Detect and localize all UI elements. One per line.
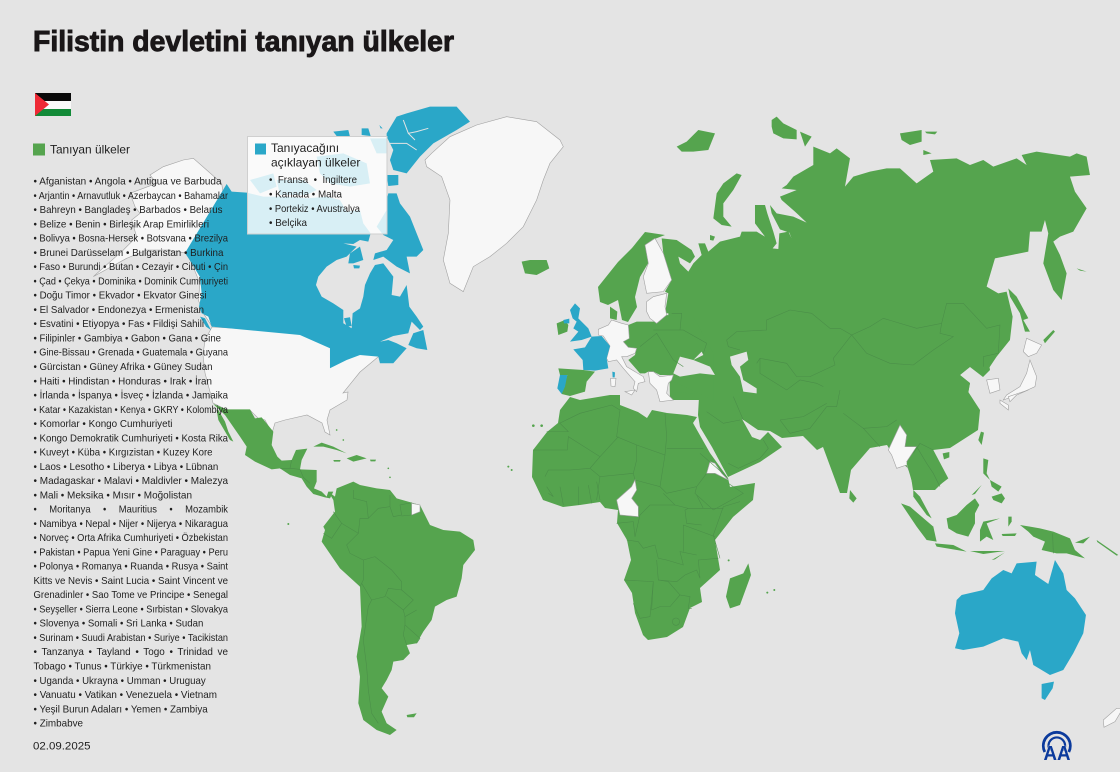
list of recognising countries: • Polonya • Romanya • Ruanda • Rusya • Saint [34, 561, 228, 573]
list of recognising countries: • Bolivya • Bosna-Hersek • Botsvana • Brezilya [34, 233, 228, 245]
Japan, South Korea [640, 303, 1042, 400]
list of recognising countries: • Gürcistan • Güney Afrika • Güney Sudan [34, 361, 213, 373]
South America [322, 482, 475, 735]
Scandinavia [598, 232, 665, 322]
list of recognising countries: • Doğu Timor • Ekvador • Ekvator Ginesi [34, 290, 206, 302]
list of recognising countries: • Laos • Lesotho • Liberya • Libya • Lübnan [34, 461, 218, 473]
panel list [269, 173, 360, 229]
list of recognising countries [34, 176, 229, 730]
legend swatch: blue [255, 144, 266, 154]
Portugal [557, 375, 567, 394]
list of recognising countries: • Norveç • Orta Afrika Cumhuriyeti • Özbekistan [34, 532, 228, 544]
Myanmar, Japan south, South-East Asia and Oceania [700, 390, 1118, 560]
list of recognising countries: • Çad • Çekya • Dominika • Dominik Cumhuriyeti [34, 275, 228, 287]
list of recognising countries: Grenadinler • Sao Tome ve Principe • Senegal [34, 589, 228, 601]
list of recognising countries: • Haiti • Hindistan • Honduras • Irak • İran [34, 374, 212, 387]
panel heading: açıklayan ülkeler [271, 156, 360, 170]
Sakhalin, Novaya Zemlya and Arctic islands [1008, 288, 1030, 332]
legend: recognising countries: Tanıyan ülkeler [50, 142, 130, 156]
Australia and Tasmania [955, 560, 1086, 700]
Canada [185, 107, 470, 368]
United Kingdom [570, 303, 592, 342]
list of recognising countries: • Kongo Demokratik Cumhuriyeti • Kosta Rika [34, 432, 228, 444]
list of recognising countries: • Bahreyn • Bangladeş • Barbados • Belarus [34, 204, 222, 216]
icon: Anadolu Agency logo [1043, 732, 1070, 765]
Western Europe white countries [598, 320, 645, 392]
icon: Anadolu Agency logo: AA [1044, 743, 1070, 765]
list of recognising countries: • Komorlar • Kongo Cumhuriyeti [34, 418, 172, 430]
list of recognising countries: • Yeşil Burun Adaları • Yemen • Zambiya [34, 703, 208, 715]
inland seas [673, 352, 715, 377]
Mexico and Central America [213, 404, 475, 735]
list of recognising countries: • Zimbabve [34, 718, 83, 730]
list of recognising countries: • Tanzanya • Tayland • Togo • Trinidad ve [34, 646, 228, 658]
list of recognising countries: • El Salvador • Endonezya • Ermenistan [34, 304, 204, 316]
list of recognising countries: • Gine-Bissau • Grenada • Guatemala • Guyana [34, 347, 228, 359]
world map [93, 107, 1120, 735]
Iceland [522, 260, 549, 275]
list of recognising countries: • Surinam • Suudi Arabistan • Suriye • Tacikistan [34, 632, 228, 644]
list of recognising countries: • Slovenya • Somali • Sri Lanka • Sudan [34, 618, 203, 630]
France [573, 336, 610, 371]
list of recognising countries: • Madagaskar • Malavi • Maldivler • Malezya [34, 475, 228, 487]
list of recognising countries: • Arjantin • Arnavutluk • Azerbaycan • Bahamalar [34, 190, 228, 202]
list of recognising countries: • Moritanya • Mauritius • Mozambik [34, 504, 229, 516]
title: Filistin devletini tanıyan ülkeler [33, 26, 454, 58]
panel list: • Portekiz • Avustralya [269, 203, 360, 215]
Southern Asia [668, 340, 990, 493]
list of recognising countries: • Filipinler • Gambiya • Gabon • Gana • Gine [34, 332, 221, 344]
panel list: • Belçika [269, 217, 307, 229]
Cameroon and Eritrea [617, 462, 728, 517]
list of recognising countries: • Belize • Benin • Birleşik Arap Emirlikleri [34, 218, 209, 230]
date: 02.09.2025 [33, 740, 90, 752]
icon: Palestinian flag [35, 93, 71, 116]
list of recognising countries: • İrlanda • İspanya • İsveç • İzlanda • Jamaika [34, 388, 228, 402]
list of recognising countries: • Seyşeller • Sierra Leone • Sırbistan • Slovakya [34, 604, 228, 616]
list of recognising countries: • Afganistan • Angola • Antigua ve Barbuda [34, 176, 222, 188]
Africa [507, 395, 775, 640]
panel: countries announcing recognition [248, 136, 387, 234]
list of recognising countries: • Namibya • Nepal • Nijer • Nijerya • Nikaragua [34, 518, 228, 530]
list of recognising countries: • Kuveyt • Küba • Kırgızistan • Kuzey Kore [34, 447, 213, 459]
panel list: • Kanada • Malta [269, 188, 342, 200]
list of recognising countries: • Mali • Meksika • Mısır • Moğolistan [34, 489, 192, 501]
list of recognising countries: • Esvatini • Etiyopya • Fas • Fildişi Sahili [34, 318, 204, 330]
New Zealand [1103, 708, 1120, 727]
Madagascar [726, 563, 751, 608]
list of recognising countries: Tobago • Tunus • Türkiye • Türkmenistan [34, 660, 211, 672]
countries not recognising: Alaska and contiguous USA, Greenland [93, 117, 563, 435]
Russia and northern Eurasia [662, 117, 1090, 400]
list of recognising countries: • Pakistan • Papua Yeni Gine • Paraguay • Peru [34, 546, 228, 558]
list of recognising countries: • Vanuatu • Vatikan • Venezuela • Vietnam [34, 689, 217, 701]
list of recognising countries: Kitts ve Nevis • Saint Lucia • Saint Vincent ve [34, 575, 228, 587]
Finland [643, 238, 672, 293]
panel list: • Fransa • İngiltere [269, 173, 357, 186]
list of recognising countries: • Brunei Darüsselam • Bulgaristan • Burkina [34, 247, 224, 259]
list of recognising countries: • Uganda • Ukrayna • Umman • Uruguay [34, 675, 206, 687]
list of recognising countries: • Katar • Kazakistan • Kenya • GKRY • Kolombiya [34, 404, 228, 416]
panel heading: Tanıyacağını [271, 141, 339, 155]
Eastern Europe and Spain, Denmark, Ireland [557, 293, 757, 402]
list of recognising countries: • Faso • Burundi • Butan • Cezayir • Cibuti • Çin [34, 261, 228, 273]
